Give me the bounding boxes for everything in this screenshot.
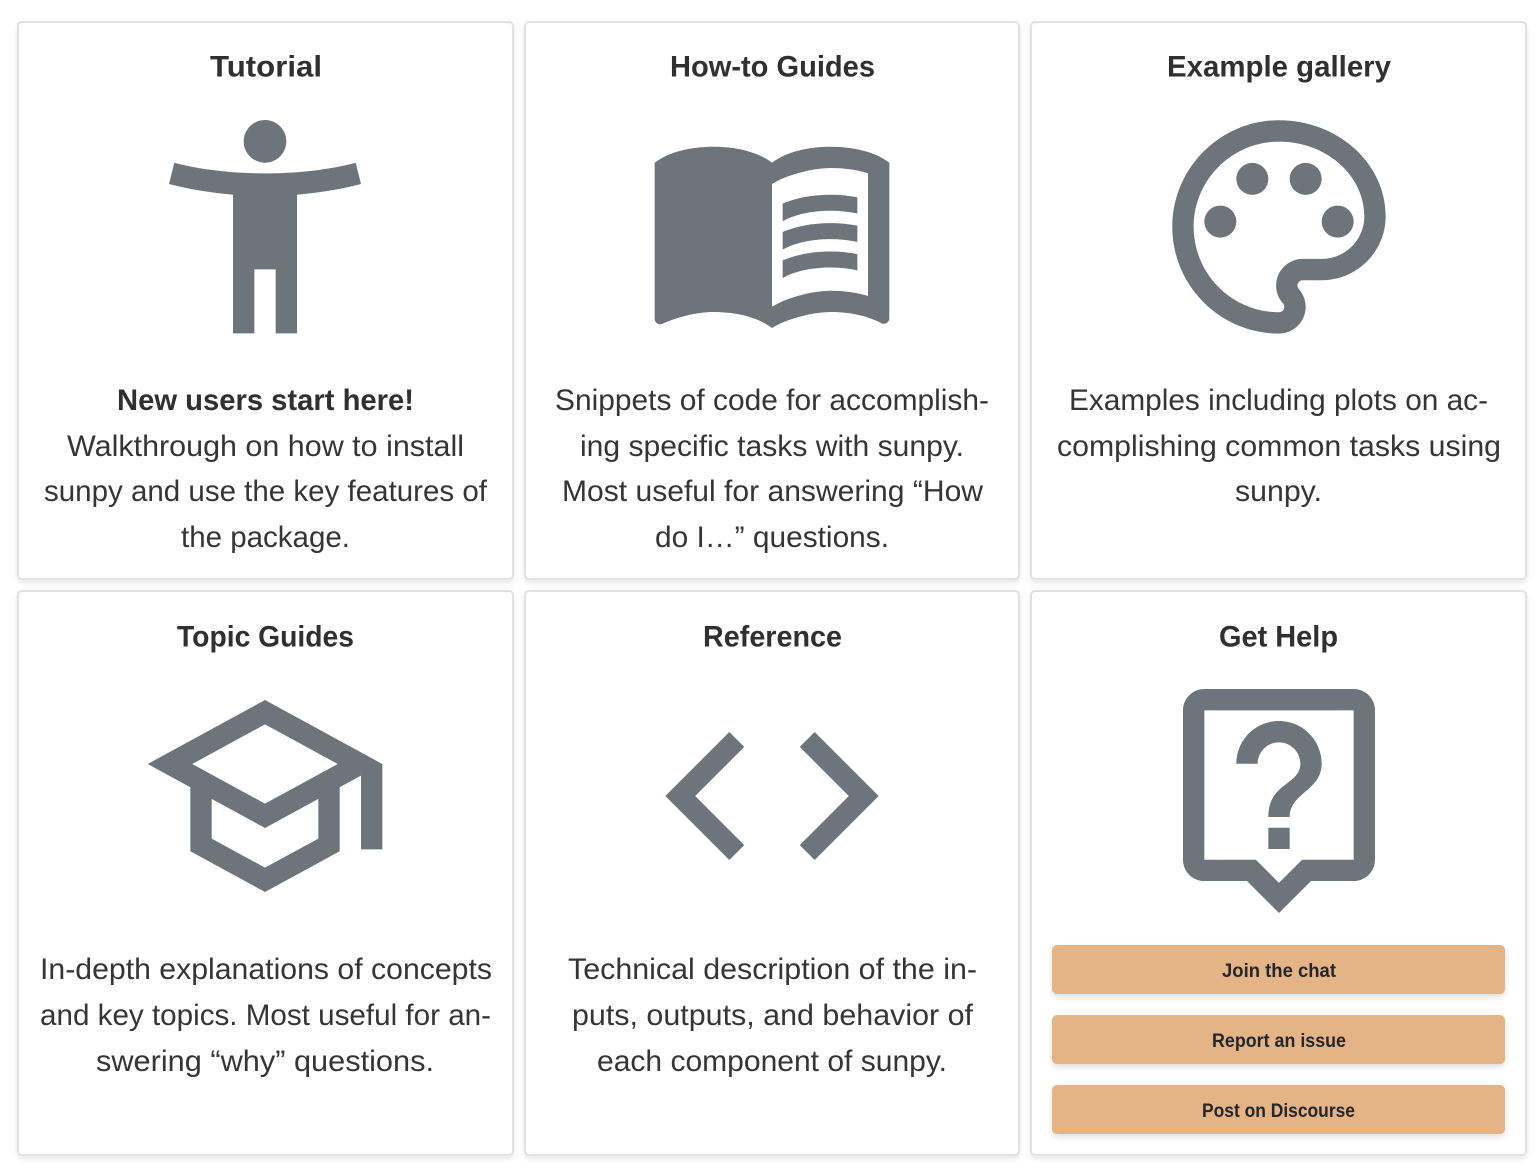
panel: Get Help [1030, 590, 1527, 1156]
text: tutorial description: Walkthrough on how to install [67, 430, 464, 463]
icon: open book [655, 147, 889, 328]
panel: Reference [524, 590, 1020, 1156]
text: gallery description [1057, 384, 1501, 508]
panel: Example gallery [1030, 21, 1527, 580]
text: tutorial description [44, 384, 488, 554]
text: how-to description [555, 384, 989, 554]
icon: graduation cap [148, 700, 382, 892]
text: gallery description: Examples including plots on ac- [1069, 384, 1488, 417]
text: reference description: Technical description of the in- [568, 953, 977, 986]
heading: How-to Guides: How-to Guides [670, 50, 875, 84]
heading: Tutorial: Tutorial [210, 50, 322, 84]
icon: code brackets [665, 732, 879, 860]
text: topic guides description [40, 953, 492, 1078]
panel: Tutorial [17, 21, 514, 580]
text: tutorial description: New users start here! [117, 384, 414, 417]
icon: painter's palette [1172, 120, 1386, 334]
text: how-to description: Snippets of code for accomplish- [555, 384, 989, 417]
button: Post on Discourse [1052, 1085, 1505, 1134]
text: reference description: puts, outputs, and behavior of [572, 999, 974, 1032]
text: topic guides description: swering “why” questions. [96, 1045, 434, 1078]
button: Report an issue [1052, 1015, 1505, 1064]
text: how-to description: Most useful for answering “How [562, 475, 983, 508]
icon: person with open arms [169, 120, 361, 333]
heading: Topic Guides: Topic Guides [177, 620, 354, 654]
panel: How-to Guides [524, 21, 1020, 580]
text: how-to description: ing specific tasks with sunpy. [580, 430, 964, 463]
heading: Example gallery: Example gallery [1167, 50, 1391, 84]
text: reference description: each component of sunpy. [597, 1045, 947, 1078]
button: Report an issue: Report an issue [1212, 1031, 1346, 1052]
icon: question speech bubble [1183, 689, 1375, 913]
button: Post on Discourse: Post on Discourse [1202, 1101, 1355, 1122]
text: topic guides description: and key topics. Most useful for an- [40, 999, 491, 1032]
heading: Get Help: Get Help [1219, 620, 1338, 654]
button: Join the chat: Join the chat [1222, 961, 1337, 982]
text: topic guides description: In-depth explanations of concepts [40, 953, 492, 986]
button: Join the chat [1052, 945, 1505, 994]
text: gallery description: sunpy. [1235, 475, 1322, 508]
text: gallery description: complishing common tasks using [1057, 430, 1501, 463]
text: how-to description: do I…” questions. [655, 521, 889, 554]
heading: Reference: Reference [703, 620, 842, 654]
text: reference description [568, 953, 977, 1078]
text: tutorial description: sunpy and use the key features of [44, 475, 488, 508]
panel: Topic Guides [17, 590, 514, 1156]
text: tutorial description: the package. [181, 521, 350, 554]
